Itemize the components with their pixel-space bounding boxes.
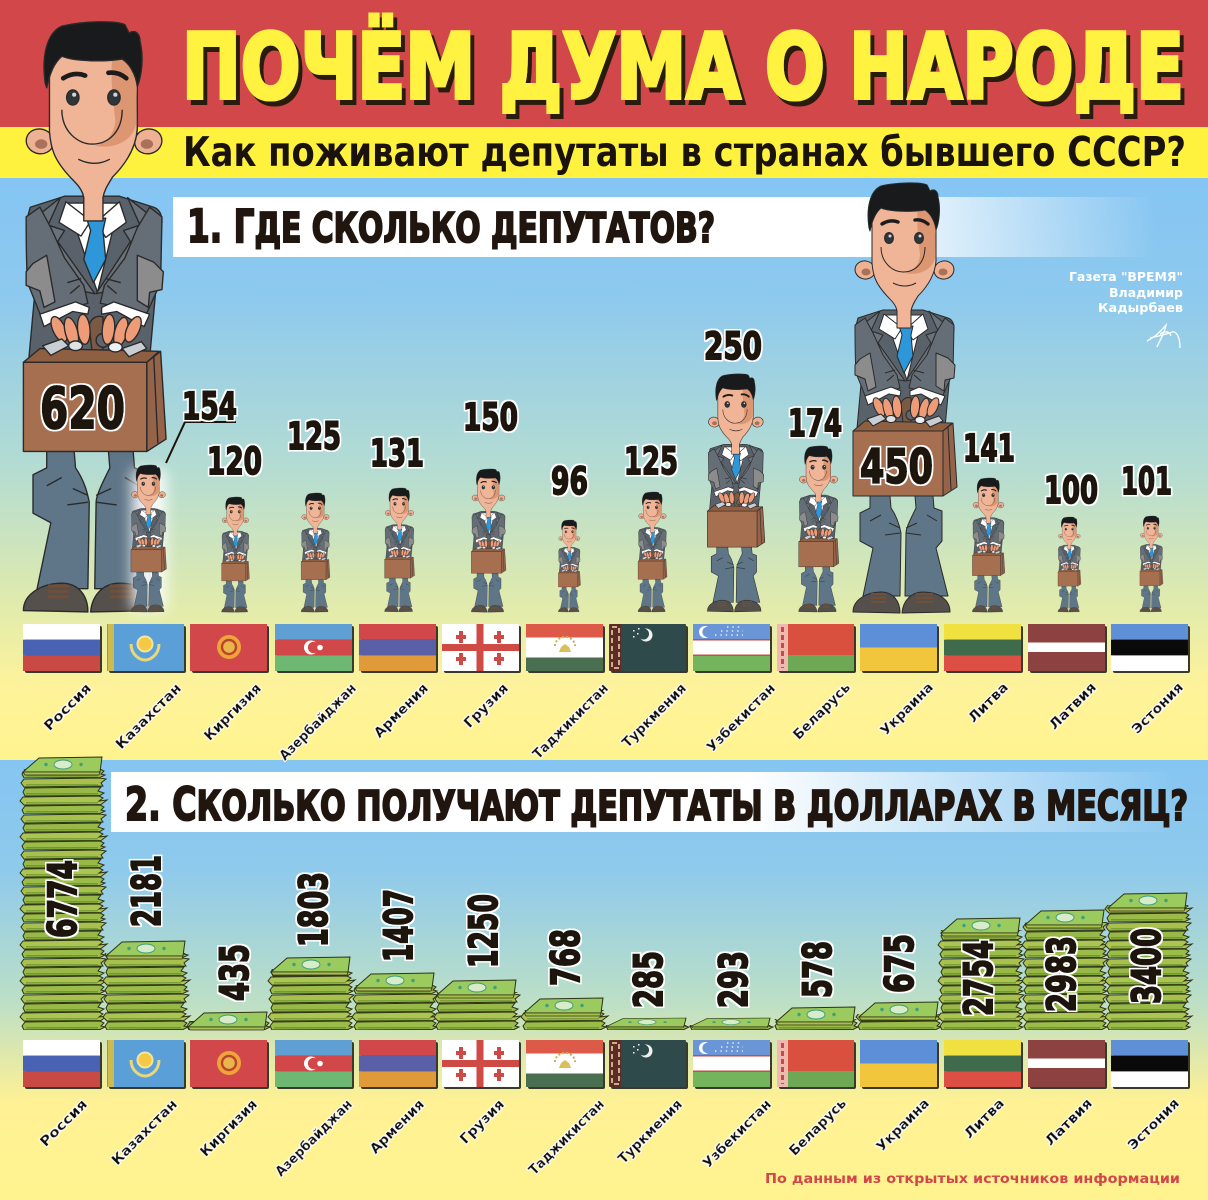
country labels row 2: Узбекистан xyxy=(701,1097,775,1171)
money stack: Uzbekistan xyxy=(684,1018,780,1030)
country labels row 2: Беларусь xyxy=(787,1096,850,1159)
flag: Armenia xyxy=(359,624,438,673)
figure: Tajikistan deputy xyxy=(558,520,581,612)
flag: Georgia xyxy=(442,624,521,673)
money stack: Estonia xyxy=(1101,893,1197,1030)
salary: Russia: 6774 xyxy=(41,860,86,938)
flag: Uzbekistan xyxy=(693,624,772,673)
flag: Azerbaijan xyxy=(275,624,354,673)
credit block: Владимир xyxy=(1109,285,1183,300)
source note: По данным из открытых источников информации xyxy=(765,1171,1180,1187)
figure: Lithuania deputy xyxy=(972,478,1005,612)
figure: Turkmenistan deputy xyxy=(638,492,667,612)
money stack: Lithuania xyxy=(934,918,1030,1030)
country labels row 2: Украина xyxy=(874,1096,933,1155)
deputy count: Lithuania: 141 xyxy=(963,427,1015,470)
flag: Azerbaijan xyxy=(275,1040,354,1089)
flag: Kazakhstan xyxy=(107,1040,186,1089)
country labels row 1: Таджикистан xyxy=(531,681,612,763)
header red band xyxy=(0,0,1208,127)
country labels row 2: Азербайджан xyxy=(273,1097,356,1180)
money stack: Russia xyxy=(16,757,112,1030)
figure: Armenia deputy xyxy=(385,488,415,612)
country labels row 1: Украина xyxy=(878,680,937,739)
country labels row 2: Киргизия xyxy=(198,1097,261,1160)
flag: Turkmenistan xyxy=(609,1040,688,1089)
flag: Armenia xyxy=(359,1040,438,1089)
section 2 heading band xyxy=(111,772,1208,832)
flag: Russia xyxy=(23,1040,102,1089)
deputy count: Latvia: 100 xyxy=(1044,469,1098,512)
country labels row 1: Киргизия xyxy=(202,681,265,744)
icon: signature xyxy=(1147,325,1180,348)
flag: Belarus xyxy=(777,624,856,673)
salary: Belarus: 578 xyxy=(796,941,841,998)
money stack: Tajikistan xyxy=(517,998,613,1030)
figure: Estonia deputy xyxy=(1140,516,1163,612)
flag: Tajikistan xyxy=(526,1040,605,1089)
figure: Georgia deputy xyxy=(471,469,506,612)
country labels row 2: Латвия xyxy=(1043,1096,1096,1149)
salary: Turkmenistan: 285 xyxy=(627,951,672,1008)
flag: Ukraine xyxy=(860,1040,939,1089)
salary: Georgia: 1250 xyxy=(462,894,507,968)
salary: Ukraine: 675 xyxy=(878,934,923,993)
salary: Armenia: 1407 xyxy=(377,889,422,962)
country labels row 1: Эстония xyxy=(1130,680,1187,737)
salary: Lithuania: 2754 xyxy=(957,940,1002,1016)
figure: Belarus deputy xyxy=(799,446,839,612)
deputy count: Estonia: 101 xyxy=(1121,460,1172,503)
credit block: Кадырбаев xyxy=(1098,300,1183,315)
flag: Belarus xyxy=(777,1040,856,1089)
flag: Ukraine xyxy=(860,624,939,673)
country labels row 1: Латвия xyxy=(1047,680,1100,733)
salary: Kyrgyzstan: 435 xyxy=(213,944,258,1001)
country labels row 2: Литва xyxy=(962,1096,1008,1142)
money stack: Armenia xyxy=(348,973,444,1030)
country labels row 1: Казахстан xyxy=(113,681,185,753)
flag: Latvia xyxy=(1028,1040,1107,1089)
figure: Kazakhstan deputy xyxy=(131,465,166,612)
country labels row 2: Армения xyxy=(368,1097,428,1157)
background: section 2 gradient xyxy=(0,760,1208,1200)
background: section 1 gradient xyxy=(0,178,1208,760)
figure: Ukraine deputy xyxy=(853,183,957,613)
deputy count: Georgia: 150 xyxy=(463,396,518,439)
figure: Russia deputy 620 xyxy=(23,22,166,612)
salary: Azerbaijan: 1803 xyxy=(292,872,337,947)
country labels row 1: Беларусь xyxy=(791,680,854,743)
flag: Lithuania xyxy=(944,624,1023,673)
salary: Tajikistan: 768 xyxy=(544,929,589,986)
country labels row 2: Казахстан xyxy=(109,1097,181,1169)
country labels row 2: Таджикистан xyxy=(527,1097,608,1179)
credit block xyxy=(1069,269,1183,315)
country labels row 1: Россия xyxy=(42,681,95,734)
deputy count: Armenia: 131 xyxy=(370,432,424,475)
money stack: Kazakhstan xyxy=(99,941,195,1030)
country labels row 1: Туркмения xyxy=(620,681,690,751)
section 1 heading band xyxy=(173,197,1208,257)
value on briefcase: Russia: 620 xyxy=(40,376,125,442)
salary: Estonia: 3400 xyxy=(1125,928,1170,1004)
salary: Latvia: 2983 xyxy=(1040,936,1085,1012)
money stack: Georgia xyxy=(430,980,526,1030)
deputy count: Kazakhstan: 154 xyxy=(182,385,237,428)
country labels row 1: Грузия xyxy=(462,681,512,731)
deputy count: Uzbekistan: 250 xyxy=(704,325,762,368)
flag: Kyrgyzstan xyxy=(190,624,269,673)
flag: Turkmenistan xyxy=(609,624,688,673)
flag: Kyrgyzstan xyxy=(190,1040,269,1089)
money stack: Belarus xyxy=(769,1007,865,1030)
deputy count: Kyrgyzstan: 120 xyxy=(207,440,262,483)
flag: Latvia xyxy=(1028,624,1107,673)
money stack: Ukraine xyxy=(852,1002,948,1030)
leader line for 154 xyxy=(166,422,236,463)
figure: Azerbaijan deputy xyxy=(301,493,330,612)
country labels row 2: Туркмения xyxy=(616,1097,686,1167)
salary: Kazakhstan: 2181 xyxy=(125,855,170,927)
header yellow band xyxy=(0,127,1208,178)
figure: Latvia deputy xyxy=(1058,517,1081,612)
country labels row 1: Узбекистан xyxy=(705,681,779,755)
flag: Estonia xyxy=(1111,624,1190,673)
credit block: Газета "ВРЕМЯ" xyxy=(1069,269,1183,284)
deputy count: Turkmenistan: 125 xyxy=(624,440,678,483)
country labels row 1: Литва xyxy=(966,680,1012,726)
figure: Uzbekistan deputy xyxy=(707,374,765,612)
country labels row 2 xyxy=(38,1096,1183,1180)
flag: Tajikistan xyxy=(526,624,605,673)
country labels row 2: Эстония xyxy=(1126,1096,1183,1153)
flags row 1 xyxy=(23,624,1190,673)
glow behind Kazakhstan figure xyxy=(132,470,166,610)
country labels row 1 xyxy=(42,680,1187,764)
country labels row 1: Азербайджан xyxy=(277,681,360,764)
flag: Uzbekistan xyxy=(693,1040,772,1089)
flags row 2 xyxy=(23,1040,1190,1089)
money stack: Turkmenistan xyxy=(600,1018,696,1030)
money stack: Latvia xyxy=(1018,910,1114,1030)
flag: Kazakhstan xyxy=(107,624,186,673)
flag: Lithuania xyxy=(944,1040,1023,1089)
value on briefcase: Ukraine: 450 xyxy=(860,440,933,495)
deputy count: Tajikistan: 96 xyxy=(551,460,588,503)
country labels row 2: Россия xyxy=(38,1097,91,1150)
heading: section 1: 1. ГДЕ СКОЛЬКО ДЕПУТАТОВ? xyxy=(187,200,715,253)
flag: Estonia xyxy=(1111,1040,1190,1089)
flag: Georgia xyxy=(442,1040,521,1089)
figure: Kyrgyzstan deputy xyxy=(222,497,249,612)
deputy count: Azerbaijan: 125 xyxy=(287,415,341,458)
country labels row 1: Армения xyxy=(372,681,432,741)
flag: Russia xyxy=(23,624,102,673)
salary: Uzbekistan: 293 xyxy=(712,951,757,1008)
money stack: Kyrgyzstan xyxy=(181,1012,277,1030)
deputy count: Belarus: 174 xyxy=(788,402,842,445)
country labels row 2: Грузия xyxy=(458,1097,508,1147)
money stack: Azerbaijan xyxy=(264,957,360,1030)
